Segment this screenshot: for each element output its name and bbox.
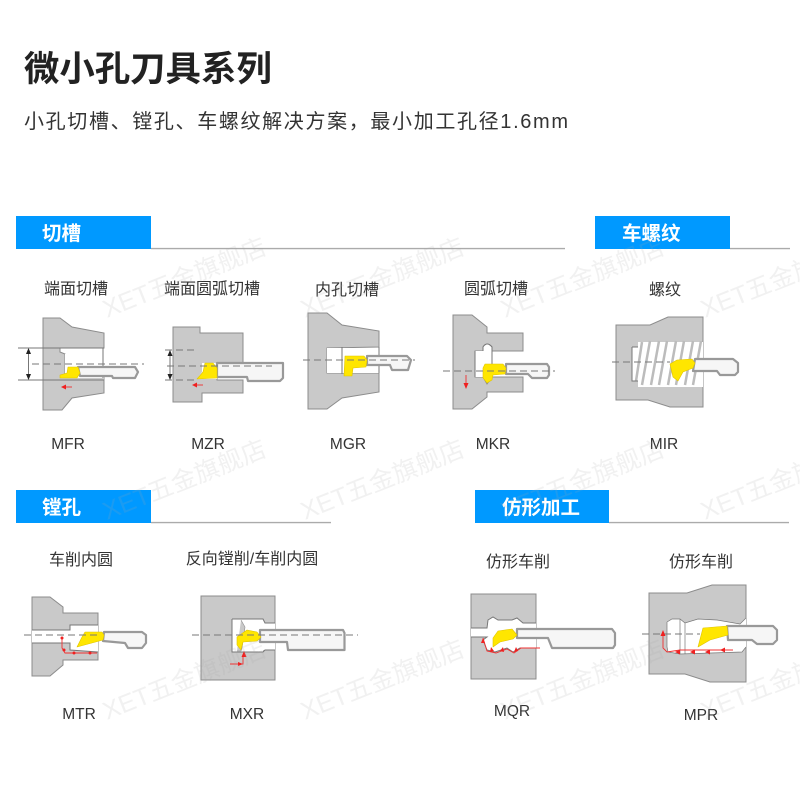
diagram: MGR: MGR: [330, 436, 366, 453]
heading: profiling: [475, 490, 789, 523]
diagram: MPR: 仿形车削: [669, 553, 733, 571]
diagram: MXR: [186, 550, 358, 723]
heading: grooving: [16, 216, 565, 249]
diagram: MZR: [164, 280, 283, 453]
diagram: MTR: [24, 551, 146, 723]
diagram: MFR: 端面切槽: [44, 280, 108, 298]
diagram: MKR: [443, 280, 555, 453]
watermark: [99, 233, 800, 726]
diagram: MXR: 反向镗削/车削内圆: [186, 550, 318, 568]
diagram: MTR: MTR: [62, 706, 96, 723]
watermark: XET五金旗舰店: [497, 435, 668, 526]
diagram: MTR: 车削内圆: [49, 551, 113, 569]
diagram: MQR: [471, 553, 615, 720]
heading: profiling: 仿形加工: [502, 497, 580, 519]
watermark: XET五金旗舰店: [297, 435, 468, 526]
diagram: MGR: [303, 281, 415, 453]
diagram: MQR: 仿形车削: [486, 553, 550, 571]
heading: grooving: 切槽: [42, 223, 81, 245]
watermark: XET五金旗舰店: [497, 233, 668, 324]
panel: grooving: [16, 216, 565, 453]
diagram: MFR: MFR: [51, 436, 85, 453]
diagram: MQR: MQR: [494, 703, 530, 720]
heading: boring: 镗孔: [42, 497, 82, 519]
heading: threading: [595, 216, 790, 249]
heading: threading: 车螺纹: [622, 222, 681, 245]
watermark: XET五金旗舰店: [297, 635, 468, 726]
diagram: MPR: [642, 553, 777, 724]
watermark: XET五金旗舰店: [99, 635, 270, 726]
panel: profiling: [471, 490, 789, 724]
diagram: MXR: MXR: [230, 706, 264, 723]
watermark: XET五金旗舰店: [99, 435, 270, 526]
diagram: MFR: [18, 280, 144, 453]
diagram: MIR: MIR: [650, 436, 678, 453]
watermark: XET五金旗舰店: [99, 233, 270, 324]
subtitle: 小孔切槽、镗孔、车螺纹解决方案，最小加工孔径1.6mm: [24, 110, 570, 133]
title: 微小孔刀具系列: [24, 49, 272, 89]
heading: boring: [16, 490, 331, 523]
diagram: MPR: MPR: [684, 707, 718, 724]
panel: boring: [16, 490, 358, 723]
diagram: MZR: MZR: [191, 436, 225, 453]
diagram: MKR: 圆弧切槽: [464, 280, 528, 298]
diagram: MZR: 端面圆弧切槽: [164, 280, 260, 298]
panel: threading: [595, 216, 790, 453]
diagram: MGR: 内孔切槽: [315, 281, 379, 299]
watermark: XET五金旗舰店: [497, 635, 668, 726]
diagram: MIR: 螺纹: [649, 281, 681, 299]
diagram: MIR: [612, 281, 738, 453]
watermark: XET五金旗舰店: [297, 233, 468, 324]
diagram: MKR: MKR: [476, 436, 510, 453]
